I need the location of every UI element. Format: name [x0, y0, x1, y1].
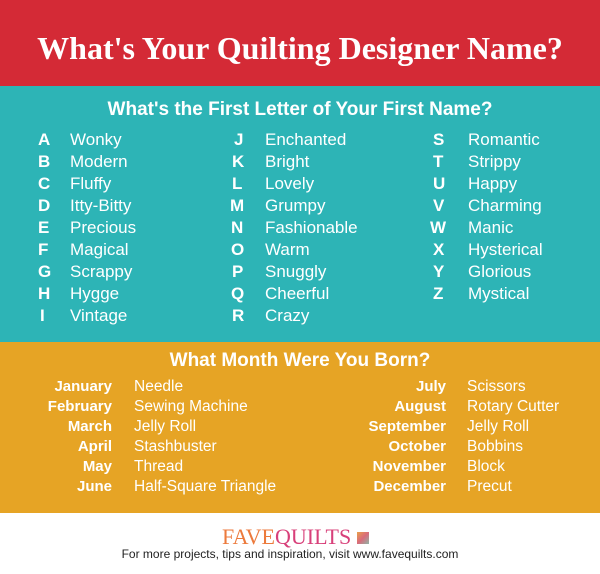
month list: Precut: [467, 478, 512, 495]
month list: December: [373, 478, 446, 495]
month list: January: [54, 378, 112, 395]
letter list: G: [38, 262, 51, 281]
letter list: Vintage: [70, 306, 127, 325]
letter list: M: [230, 196, 244, 215]
month list: April: [78, 438, 112, 455]
month list: October: [388, 438, 446, 455]
month list: November: [373, 458, 446, 475]
letter list: X: [433, 240, 444, 259]
letter list: Itty-Bitty: [70, 196, 131, 215]
letter list: Y: [433, 262, 444, 281]
letter list: U: [433, 174, 445, 193]
panel: first letter: [0, 86, 600, 342]
letter list: Fluffy: [70, 174, 111, 193]
letter list: V: [433, 196, 444, 215]
panel: birth month: [0, 342, 600, 513]
letter list: Modern: [70, 152, 128, 171]
month list: Sewing Machine: [134, 398, 248, 415]
month list: Jelly Roll: [134, 418, 196, 435]
letter list: Bright: [265, 152, 309, 171]
letter list: P: [232, 262, 243, 281]
letter list: Strippy: [468, 152, 521, 171]
letter list: Z: [433, 284, 443, 303]
letter list: Wonky: [70, 130, 122, 149]
letter list: K: [232, 152, 244, 171]
month list: Bobbins: [467, 438, 523, 455]
letter list: Warm: [265, 240, 310, 259]
letter list: Manic: [468, 218, 513, 237]
month list: September: [368, 418, 446, 435]
letter list: Magical: [70, 240, 129, 259]
letter list: Enchanted: [265, 130, 346, 149]
letter list: S: [433, 130, 444, 149]
letter list: Q: [231, 284, 244, 303]
month list: June: [77, 478, 112, 495]
heading: first letter: What's the First Letter of Your First Name?: [108, 99, 492, 120]
letter list: Mystical: [468, 284, 529, 303]
letter list: C: [38, 174, 50, 193]
letter list: T: [433, 152, 443, 171]
letter list: O: [231, 240, 244, 259]
letter list: D: [38, 196, 50, 215]
month list: Needle: [134, 378, 183, 395]
month list: Thread: [134, 458, 183, 475]
month list: Jelly Roll: [467, 418, 529, 435]
month list: Stashbuster: [134, 438, 217, 455]
letter list: L: [232, 174, 242, 193]
header band: [0, 0, 600, 86]
letter list: Precious: [70, 218, 136, 237]
letter list: Charming: [468, 196, 542, 215]
letter list: Grumpy: [265, 196, 325, 215]
letter list: F: [38, 240, 48, 259]
month list: [48, 378, 559, 495]
letter list: H: [38, 284, 50, 303]
letter list: Romantic: [468, 130, 540, 149]
letter list: Hysterical: [468, 240, 543, 259]
tagline: For more projects, tips and inspiration, visit www.favequilts.com: [122, 547, 458, 561]
letter list: N: [231, 218, 243, 237]
letter list: Hygge: [70, 284, 119, 303]
month list: Block: [467, 458, 505, 475]
letter list: Fashionable: [265, 218, 358, 237]
letter list: W: [430, 218, 446, 237]
letter list: Glorious: [468, 262, 531, 281]
letter list: R: [232, 306, 244, 325]
logo: FAVEQUILTS: [222, 524, 351, 549]
month list: Half-Square Triangle: [134, 478, 276, 495]
letter list: B: [38, 152, 50, 171]
month list: July: [416, 378, 446, 395]
month list: February: [48, 398, 112, 415]
letter list: Scrappy: [70, 262, 132, 281]
month list: March: [68, 418, 112, 435]
heading: month: What Month Were You Born?: [170, 350, 430, 371]
letter list: Snuggly: [265, 262, 326, 281]
month list: Scissors: [467, 378, 526, 395]
letter list: I: [40, 306, 45, 325]
letter list: Lovely: [265, 174, 314, 193]
letter list: Crazy: [265, 306, 309, 325]
letter list: E: [38, 218, 49, 237]
month list: Rotary Cutter: [467, 398, 559, 415]
title: What's Your Quilting Designer Name?: [37, 30, 563, 66]
letter list: Happy: [468, 174, 517, 193]
letter list: J: [234, 130, 243, 149]
letter list: [38, 130, 543, 325]
letter list: Cheerful: [265, 284, 329, 303]
month list: May: [83, 458, 112, 475]
month list: August: [394, 398, 446, 415]
letter list: A: [38, 130, 50, 149]
